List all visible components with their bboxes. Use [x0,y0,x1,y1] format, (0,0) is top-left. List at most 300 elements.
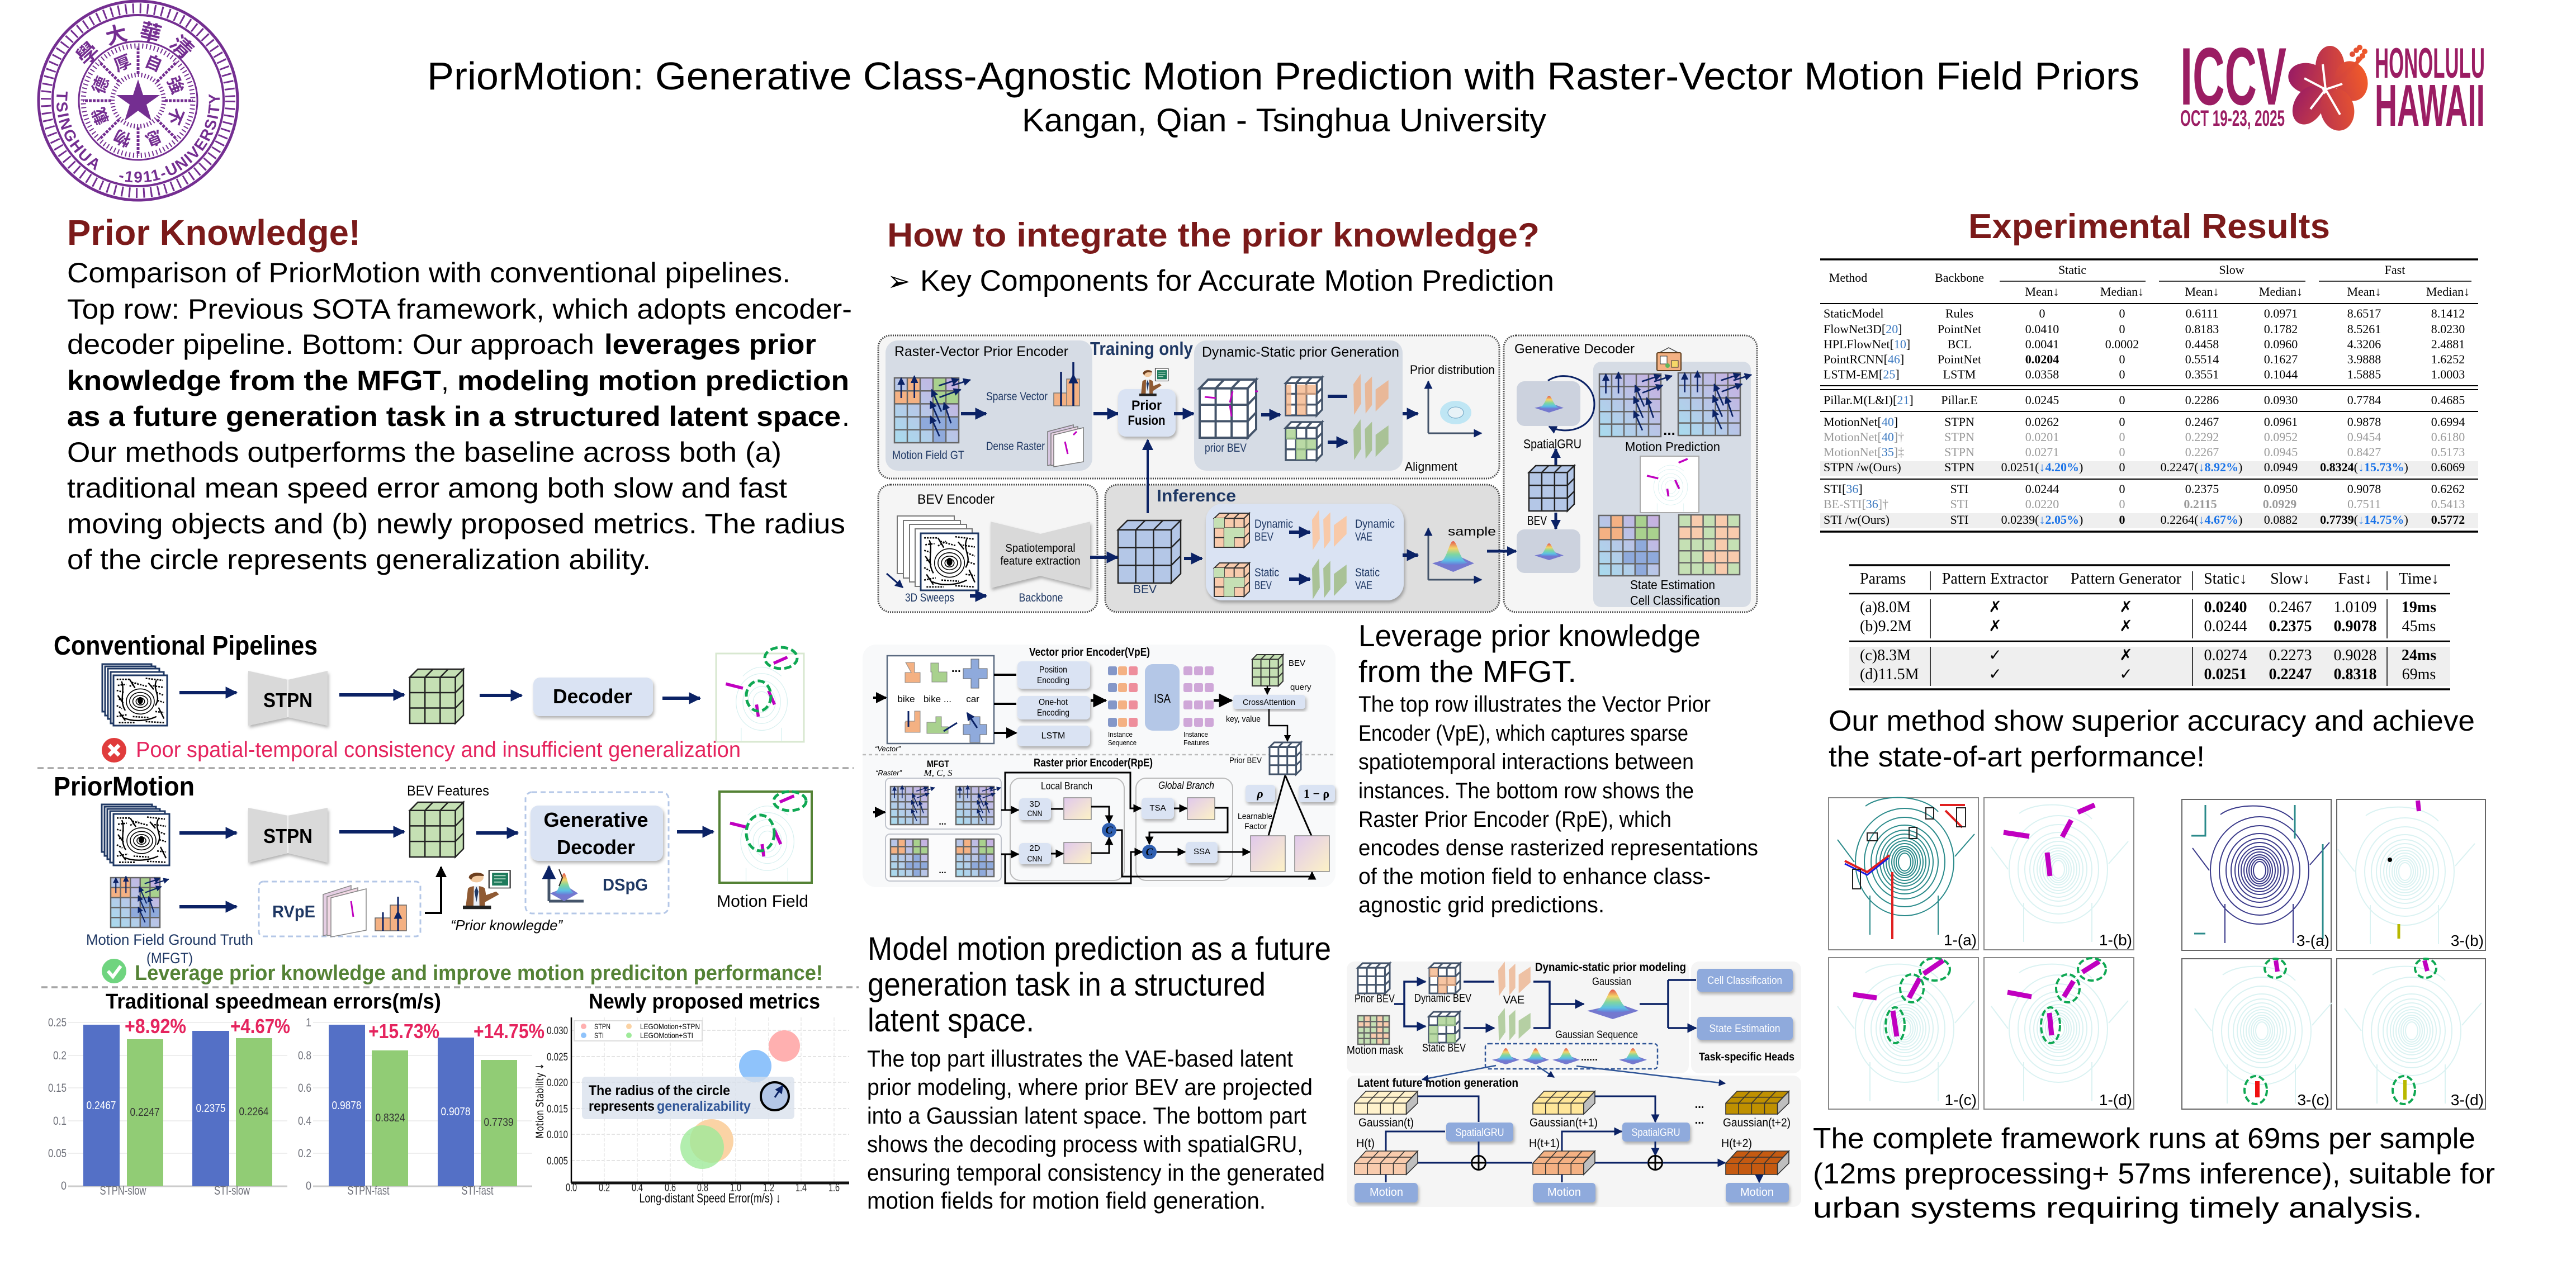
text block: prior knowledge description: knowledge from the MFGT [67,365,441,396]
row: Pillar: 0.7784 [2347,393,2381,407]
rows: baselines: 0.8183 [2185,322,2219,336]
rows: baselines [1824,306,2465,381]
header row: Median↓ [2426,285,2470,299]
rows: STPN group: 0.0251(↓4.20%) [2001,460,2083,474]
block: local branch: CNN [1027,809,1042,818]
panel: latent future motion generation: SpatialGRU [1456,1127,1504,1139]
row: Pillar: 0 [2119,393,2125,407]
panel: latent future motion generation: Gaussian(t+2) [1723,1116,1791,1129]
logo: Tsinghua University seal: TSINGHUA [56,92,98,171]
bubble chart: newly proposed metrics: 0.4 [632,1182,643,1194]
bar chart: fast objects mean error: 0.7739 [484,1116,513,1129]
rows: STPN group: 0.0271 [2025,445,2059,459]
heading: model motion prediction: Model motion prediction as a future [868,931,1331,967]
data rows: 0.8318 [2333,666,2377,683]
rows: STPN group: 0.9878 [2347,415,2381,429]
text block: vector and raster explanation [1358,692,1758,917]
header row: Median↓ [2259,285,2303,299]
rows: STPN group: 0.2292 [2185,430,2219,444]
block: decoder: Decoder [553,685,632,708]
text block: VAE explanation: motion fields for motion field generation. [867,1187,1266,1214]
panel: PriorMotion pipeline diagram [54,772,823,985]
rows: STPN group: 0.2267 [2185,445,2219,459]
data rows: ✗ [2119,647,2133,664]
heading: leverage prior knowledge [1358,618,1701,689]
header row: Pattern Extractor [1942,570,2049,588]
bar chart: slow objects mean error: STI-slow [214,1183,250,1197]
rows: STPN group: 0.2467 [2185,415,2219,429]
text block: prior knowledge description: . [842,401,850,432]
logo: Tsinghua University seal: 強 [163,74,187,97]
arrow [1403,412,1418,415]
rows: STPN group: STPN [1944,415,1974,429]
logo: ICCV Honolulu Hawaii: ICCV [2180,31,2286,122]
arrow [179,905,236,908]
rows: baselines: 1.5885 [2347,367,2381,381]
group: RVpE encoder [259,882,420,937]
block: cross attention [1233,695,1305,709]
rows: baselines: 0.0410 [2025,322,2059,336]
text block: prior knowledge description: decoder pipeline. Bottom: Our approach [67,329,594,360]
bar chart: slow objects mean error: 0.2247 [130,1106,160,1119]
arrow [1093,412,1118,415]
text block: prior knowledge description: Top row: Previous SOTA framework, which adopts encoder- [67,293,852,325]
block: prior fusion [1118,368,1176,437]
heading: leverage prior knowledge: from the MFGT. [1358,654,1576,689]
rows: STI group: 0.2375 [2185,482,2219,496]
rows: baselines: 4.3206 [2347,337,2381,351]
subheading: key components: Key Components for Accurate Motion Prediction [920,264,1554,297]
block: global branch: TSA [1149,803,1166,813]
block: LSTM [1017,726,1090,746]
logo: Tsinghua University seal: 自 [142,52,165,75]
rows: STI group: STI [1950,497,1969,511]
rows: baselines: 0 [2039,306,2045,320]
panel: dynamic-static prior modeling: Dynamic-static prior modeling [1535,961,1686,974]
image: scene 1-(b) [1984,798,2134,950]
logo: ICCV Honolulu Hawaii: OCT 19-23, 2025 [2180,106,2285,131]
panel: dynamic and static VAE: Dynamic [1355,518,1395,531]
bubble chart: newly proposed metrics: 1.0 [730,1182,741,1194]
text block: VAE explanation [867,1045,1325,1214]
arrow [1174,412,1194,415]
text block: vector and raster explanation: The top row illustrates the Vector Prior [1358,692,1711,717]
rows: baselines: PointNet [1938,352,1981,366]
rows: baselines: FlowNet3D[20] [1824,322,1902,336]
rows: baselines: 1.0003 [2431,367,2465,381]
icon: prior BEV cube: Prior BEV [1229,756,1262,765]
rows: baselines: PointRCNN[46] [1824,352,1904,366]
block: spatial GRU gaussian [1517,376,1594,430]
data rows: (c)8.3M [1860,647,1911,664]
rows: STPN group: 0 [2119,430,2125,444]
block: cross attention: CrossAttention [1243,698,1295,707]
rows: baselines: 0.0204 [2025,352,2059,366]
data rows: 0.0274 [2204,647,2247,664]
image: scene 3-(b) [2337,799,2485,950]
rows: baselines: 0.3551 [2185,367,2219,381]
panel: dynamic-static prior modeling: Gaussian Sequence [1555,1029,1638,1041]
icon: BEV feature cube [410,669,463,723]
text block: prior knowledge description: of the circle represents generalization ability. [67,544,651,575]
rows: STPN group: 0.0949 [2264,460,2298,474]
panel: raster-vector prior encoder: Dense Raster [986,440,1045,453]
image: scene 1-(d): 1-(d) [2099,1091,2132,1109]
block: local branch: CNN [1027,854,1042,864]
row: Pillar: Pillar.E [1941,393,1978,407]
icon: instance feature tokens: Instance [1183,730,1208,738]
bar chart: slow objects mean error: 0.2264 [239,1106,268,1118]
image: scene 3-(c): 3-(c) [2297,1091,2329,1109]
icon: motion prediction grids: ... [1663,422,1675,438]
block: state estimation head: State Estimation [1710,1023,1780,1035]
data rows: 0.0251 [2204,666,2247,683]
rows: STI group: 0.7511 [2347,497,2381,511]
rows: STPN group: STPN [1944,445,1974,459]
bar chart: slow objects mean error: 0.2 [53,1049,67,1062]
block: sampled gaussian input [1517,529,1580,573]
logo: Tsinghua University seal: 厚 [111,52,134,75]
panel: raster-vector prior encoder: Motion Field GT [892,449,964,462]
rows: STI group: 0.5772 [2431,513,2465,527]
icon: BEV feature cube [410,802,463,857]
panel: BEV encoder: Spatiotemporal [1005,542,1076,555]
panel: latent future motion generation: ... [1695,1098,1704,1111]
text block: prior knowledge description: Comparison of PriorMotion with conventional pipelines. [67,257,790,288]
block: STPN backbone: STPN [263,689,312,712]
legend [574,1021,702,1041]
icon: error cross [102,738,126,763]
rows: baselines: 0.4458 [2185,337,2219,351]
rows: STPN group: 0.0201 [2025,430,2059,444]
heading: PriorMotion: PriorMotion [54,772,195,802]
icon: instance sequence tokens: Sequence [1108,738,1137,747]
bar chart: slow objects mean error: 0.05 [48,1147,67,1160]
text block: vector and raster explanation: Raster Prior Encoder (RpE), which [1358,807,1671,832]
subtitle: author: Kangan, Qian - Tsinghua University [1022,102,1546,139]
block: learnable factor maps: 1 − ρ [1304,787,1329,801]
data rows: (a)8.0M [1860,599,1911,616]
block: one-hot encoding: One-hot [1039,698,1068,707]
image: scene 1-(d) [1984,958,2134,1109]
rows: baselines: 8.5261 [2347,322,2381,336]
label: task-specific heads: Task-specific Heads [1699,1051,1794,1063]
text block: runtime summary: (12ms preprocessing+ 57ms inference), suitable for [1813,1158,2495,1190]
data rows: ✓ [1988,666,2002,683]
bubble chart: newly proposed metrics: 0.005 [547,1156,568,1167]
bar chart: fast objects mean error: 0.8324 [376,1112,405,1124]
icon: success check [102,959,126,983]
rows: STI group: 0.0882 [2264,513,2298,527]
block: cell classification head: Cell Classification [1707,975,1782,987]
header row: Slow [2219,263,2244,277]
bar chart: fast objects mean error: 0.9878 [332,1100,361,1112]
rows: STI group: STI /w(Ours) [1824,513,1890,527]
bubble chart: newly proposed metrics: 0.020 [547,1077,568,1089]
diagram: vector and raster prior encoder: “Vector” [875,745,901,753]
legend: STPN [594,1022,610,1031]
block: position encoding: Encoding [1037,676,1069,685]
rows: baselines: 0 [2119,306,2125,320]
rows: STPN group: 0 [2119,445,2125,459]
header row [1829,263,2470,299]
bubble chart: newly proposed metrics: 1.4 [795,1182,807,1194]
block: learnable factor maps: Factor [1244,822,1267,831]
bar chart: fast objects mean error: STPN-fast [348,1183,389,1197]
bubble chart: newly proposed metrics: 0.025 [547,1052,568,1063]
rows: STPN group [1824,415,2465,474]
arrows: sequence to time steps [1422,1066,1725,1083]
heading: traditional errors chart: Traditional speedmean errors(m/s) [106,990,441,1014]
bar chart: slow objects mean error: STPN-slow [100,1183,146,1197]
text block: VAE explanation: into a Gaussian latent space. The bottom part [867,1102,1306,1129]
bar chart: slow objects mean error: 0 [61,1180,67,1192]
icon: lidar sweep stack [102,804,169,865]
panel: dynamic and static VAE: VAE [1355,531,1372,543]
rows: STI group: 0.2264(↓4.67%) [2161,513,2242,527]
heading: conventional pipelines: Conventional Pipelines [54,631,318,661]
heading: leverage prior knowledge: Leverage prior knowledge [1358,618,1701,653]
icon: instance sequence tokens: Instance [1108,730,1133,738]
bubble chart: newly proposed metrics: 1.6 [828,1182,840,1194]
callout: radius of the circle: represents [589,1098,655,1114]
block: learnable factor maps [1238,785,1335,872]
header row: Slow↓ [2270,570,2310,588]
arrow [1403,553,1418,557]
header row: Params [1860,570,1906,588]
rows: STI group: 0 [2119,513,2125,527]
rows: STI group: 0.2115 [2184,497,2217,511]
block: state estimation head [1697,1017,1793,1040]
panel: raster-vector prior encoder [886,340,1092,471]
panel: BEV encoder: Backbone [1019,591,1063,604]
data rows: 0.2273 [2269,647,2312,664]
bubble chart: newly proposed metrics: 0.010 [547,1129,568,1141]
data rows: ✗ [2119,599,2133,616]
row: Pillar: 0.2286 [2185,393,2219,407]
panel: dynamic-static prior modeling: VAE [1503,994,1524,1006]
diagram: vector and raster prior encoder: key, value [1226,714,1261,724]
row: Pillar: 0.0930 [2264,393,2298,407]
text block: prior knowledge description: as a future generation task in a structured latent space [67,401,841,432]
panel: latent future motion generation: Motion [1547,1186,1581,1199]
data rows [1860,599,2436,683]
arrow [476,831,518,835]
rows: STI group: 0.0244 [2025,482,2059,496]
label: motion field ground truth: Motion Field Ground Truth [86,931,253,948]
image: scene 3-(b): 3-(b) [2451,932,2484,949]
data rows: ✗ [1988,618,2002,635]
callout: conventional pipeline problem: Poor spatial-temporal consistency and insufficient generalization [136,738,741,762]
rows: STPN group: MotionNet[40] [1824,415,1898,429]
label: BEV features: BEV Features [407,783,489,799]
logo: Tsinghua University seal: 息 [142,126,165,149]
diagram: latent generation [1347,961,1801,1207]
data rows: ✗ [2119,618,2133,635]
logo: Tsinghua University seal: 德 [89,74,113,97]
image: scene 1-(a) ground truth [1829,798,1978,950]
data rows: ✗ [1988,599,2002,616]
group: generative decoder with DSpG: Generative [543,808,648,831]
panel: conventional pipeline diagram [54,631,804,763]
block: local branch: C [1106,825,1113,836]
block: instance tokens: car [966,694,979,704]
panel: prior knowledge heading: Prior Knowledge! [67,212,361,253]
panel: dynamic and static VAE: Static [1254,566,1279,579]
diagram: vector and raster prior encoder: “Raster” [875,769,902,777]
rows: baselines: 8.6517 [2347,306,2381,320]
label: motion field ground truth: (MFGT) [146,950,193,967]
data rows: 24ms [2402,647,2436,664]
icon: lidar sweep stack [102,664,167,726]
data rows: (b)9.2M [1860,618,1912,635]
text block: prior knowledge description: Our methods outperforms the baseline across both (a) [67,437,782,468]
bar chart: fast objects mean error: 0 [306,1180,311,1192]
rows: STPN group: STPN [1944,460,1974,474]
text block: runtime summary: urban systems requiring timely analysis. [1813,1192,2422,1224]
bubble chart: newly proposed metrics: 0.015 [547,1104,568,1115]
table: results comparison [1820,259,2478,532]
panel: dynamic-static prior generation: prior BEV [1205,442,1247,454]
block: instance tokens [887,656,994,744]
rows: baselines: 0.5514 [2185,352,2219,366]
panel: inference: Inference [1157,486,1236,505]
header row: Backbone [1935,271,1984,285]
bar chart: slow objects mean error: 0.25 [48,1016,67,1029]
row: Pillar: 0.0245 [2025,393,2059,407]
rows: STPN group: STPN [1944,430,1974,444]
panel: dynamic and static VAE: VAE [1355,579,1372,592]
rows: STPN group: 0.0952 [2264,430,2298,444]
block: prior fusion: Fusion [1128,413,1165,428]
text block: prior knowledge description: traditional mean speed error among both slow and fast [67,472,787,504]
panel: generative decoder: Generative Decoder [1514,342,1635,357]
panel: BEV encoder: feature extraction [1001,555,1080,567]
image: scene 1-(b): 1-(b) [2099,931,2132,949]
group: generative decoder with DSpG: DSpG [603,875,648,894]
bar chart: slow objects mean error: 0.2467 [86,1100,116,1112]
block: ISA: ISA [1154,692,1171,705]
arrow [179,831,236,835]
rows: STPN group: 0.8427 [2347,445,2381,459]
panel: latent future motion generation: Gaussian(t+1) [1530,1116,1598,1129]
image: PriorMotion motion field output [719,792,812,883]
bar chart: slow objects mean error: +4.67% [230,1015,290,1038]
group: RVpE encoder: RVpE [272,902,315,921]
image: scene 3-(c) [2182,959,2332,1109]
icon: teacher [463,870,510,909]
rows: STI group: 0 [2119,482,2125,496]
callout: radius of the circle: The radius of the circle [589,1083,730,1098]
rows: STPN group: STPN /w(Ours) [1824,460,1901,474]
bar chart: fast objects mean error: 0.8 [298,1049,311,1062]
rows: STPN group: 0.5173 [2431,445,2465,459]
data rows: 0.0240 [2204,599,2247,616]
arrow: prior feed to BEV [425,867,441,913]
block: LSTM: LSTM [1041,731,1065,741]
bar chart: fast objects mean error: 0.4 [298,1115,311,1128]
rows: STI group: 0.6262 [2431,482,2465,496]
panel: latent future motion generation: H(t+2) [1721,1137,1752,1150]
bubble chart: newly proposed metrics: 1.2 [763,1182,774,1194]
bar chart: fast objects mean error: 0.2 [298,1147,311,1160]
bar chart: slow objects mean error: 0.1 [53,1115,67,1128]
rows: baselines: 0.0041 [2025,337,2059,351]
header row: Mean↓ [2185,285,2219,299]
rows: baselines: 0.0358 [2025,367,2059,381]
block: learnable factor maps: Learnable [1238,812,1272,821]
block: local branch [1010,778,1124,880]
heading: vector prior encoder: Vector prior Encoder(VpE) [1029,646,1150,659]
header row: Static [2058,263,2086,277]
logo: Tsinghua University seal [37,0,239,201]
data rows: ✓ [2119,666,2133,683]
arrow [480,694,522,697]
rows: STI group: BE-STI[36]† [1824,497,1888,511]
bar chart: fast objects mean error: +15.73% [368,1020,439,1043]
bubble chart: newly proposed metrics: 0.0 [566,1182,577,1194]
rows: baselines: BCL [1948,337,1971,351]
label: MFGT raster inputs: MFGT [927,759,950,769]
table: ablation study [1849,565,2450,689]
chart: sampled gaussian: sample [1448,524,1496,538]
block: local branch: 2D [1029,844,1040,853]
data rows: 0.2247 [2269,666,2312,683]
block: STPN backbone: STPN [263,825,312,847]
bar chart: slow objects mean error: 0.15 [48,1082,67,1095]
block: global branch: C [1146,846,1153,858]
rows: STPN group: 0.0961 [2264,415,2298,429]
panel: generative decoder [1487,335,1757,612]
lines: raster flow connections [1001,773,1312,883]
bar chart: slow objects mean error: 0.2375 [196,1102,226,1115]
rows: baselines: 3.9888 [2347,352,2381,366]
panel: dynamic-static prior modeling: Gaussian [1592,976,1631,988]
panel: latent future motion generation: H(t) [1356,1137,1375,1150]
text block: VAE explanation: prior modeling, where prior BEV are projected [867,1074,1313,1100]
panel: BEV encoder: BEV Encoder [917,492,995,507]
image: scene 3-(a) ground truth: 3-(a) [2296,932,2329,949]
rows: STPN group: 0 [2119,460,2125,474]
panel: latent future motion generation: Gaussian(t) [1358,1116,1414,1129]
block: decoder [533,678,653,716]
panel: dynamic-static prior modeling: Dynamic BEV [1414,992,1472,1005]
data rows: 0.9028 [2333,647,2377,664]
block: position encoding: Position [1039,665,1067,675]
header row: Static↓ [2204,570,2247,588]
group: gaussian sequence: ...... [1581,1052,1598,1063]
panel: inference [1105,485,1499,612]
rows: STI group: 0.0950 [2264,482,2298,496]
logo: Tsinghua University seal: 學大華清 [75,21,195,64]
block: global branch [1136,778,1250,880]
header row: Mean↓ [2347,285,2381,299]
text block: prior knowledge description: moving objects and (b) newly proposed metrics. The radius [67,508,845,539]
block: class raster grids: ... [939,866,946,875]
header row: Mean↓ [2025,285,2059,299]
arrow [339,830,404,834]
logo: Tsinghua University seal: 不 [163,105,187,127]
text block: prior knowledge description [67,257,852,575]
rows: baselines: 0.1044 [2264,367,2298,381]
bar chart: fast objects mean error: 0.6 [298,1082,311,1095]
rows: baselines: LSTM [1943,367,1976,381]
image: motion field sample [1640,456,1699,513]
icon: pin board [1657,348,1681,371]
header row: Median↓ [2100,285,2144,299]
block: instance tokens: ... [951,662,961,675]
data rows: 45ms [2402,618,2436,635]
